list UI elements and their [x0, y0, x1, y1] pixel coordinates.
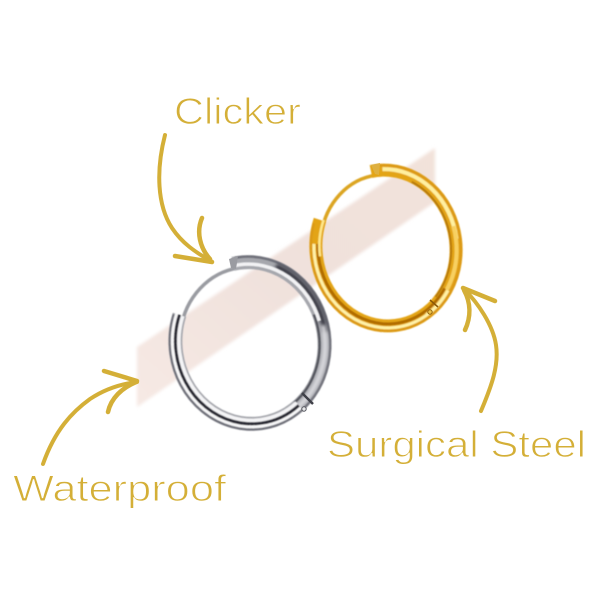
silver hoop: right highlight: [164, 252, 336, 434]
silver hoop: outer rim: [159, 246, 341, 440]
silver hoop: right inner shade: [171, 258, 329, 428]
silver hoop: upper highlight: [167, 255, 333, 431]
gold hoop: lower highlight: [305, 160, 467, 336]
silver hoop: thick tube: [165, 252, 335, 434]
gold hoop: thick tube: [307, 162, 465, 334]
label: Surgical Steel: Surgical Steel: [327, 424, 586, 465]
arrow: surgical steel: [463, 288, 497, 411]
arrow: waterproof: [43, 371, 137, 464]
arrow: clicker: [159, 135, 212, 262]
gold hoop: lower shade: [309, 164, 463, 332]
gold hoop: right highlight: [306, 161, 466, 335]
gold hoop: right inner shade: [313, 168, 459, 328]
silver hoop: lower dark line: [165, 252, 335, 434]
silver hoop: hinge: [302, 393, 313, 411]
gold hoop: outer shade: [301, 156, 471, 340]
gold hoop: left highlight: [311, 166, 461, 330]
label: Waterproof: Waterproof: [13, 468, 227, 509]
label: Clicker: Clicker: [174, 91, 301, 132]
gold hoop: thin clicker pin: [312, 167, 460, 329]
silver hoop: upper right dark band: [163, 251, 337, 435]
gold hoop: clicker step: [371, 163, 380, 175]
silver hoop: lower outer highlight: [162, 249, 338, 437]
silver hoop: clicker step: [229, 256, 238, 269]
gold hoop: hinge: [428, 300, 438, 314]
background: pink angled block: [137, 148, 435, 407]
gold hoop: upper right highlight: [306, 161, 466, 335]
silver hoop: lower inner highlight: [169, 256, 331, 430]
silver hoop: thin clicker pin: [170, 258, 330, 428]
gold hoop earring: [301, 156, 471, 340]
silver hoop earring: [159, 246, 341, 440]
